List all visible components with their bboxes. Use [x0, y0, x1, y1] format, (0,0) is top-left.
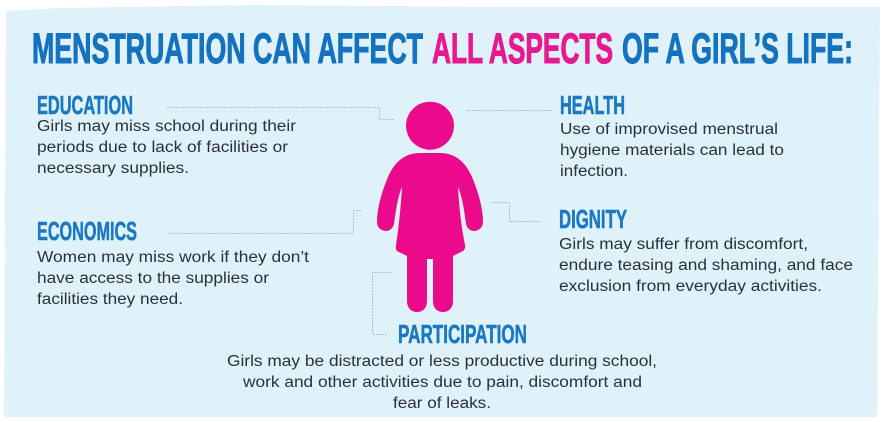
panel: health: Use of improvised menstrual [560, 121, 778, 138]
panel: participation: Girls may be distracted or less productive during school, [227, 353, 657, 370]
panel: health: hygiene materials can lead to [560, 142, 784, 159]
connector: education [167, 108, 394, 120]
panel: participation: work and other activities due to pain, discomfort and [242, 374, 642, 391]
panel: education: Girls may miss school during their [37, 118, 296, 135]
panel: education: EDUCATION [37, 90, 133, 120]
panel: economics [37, 216, 310, 308]
connector: participation [372, 272, 391, 334]
connector: health [466, 110, 552, 112]
panel: economics: facilities they need. [37, 291, 183, 308]
title: ALL ASPECTS [432, 26, 613, 73]
connector: dignity [491, 202, 540, 222]
panel: dignity [559, 204, 853, 295]
title: MENSTRUATION CAN AFFECT [32, 26, 423, 73]
panel: economics: Women may miss work if they don’t [37, 249, 310, 266]
panel: health: HEALTH [560, 90, 625, 120]
figure head [406, 102, 454, 150]
panel: education: periods due to lack of facilities or [37, 139, 288, 156]
figure body [377, 153, 483, 312]
panel: participation: fear of leaks. [393, 395, 491, 412]
panel: economics: have access to the supplies or [37, 270, 269, 287]
panel: education: necessary supplies. [37, 160, 189, 177]
panel: participation [227, 319, 657, 412]
panel: dignity: endure teasing and shaming, and face [559, 257, 853, 274]
icon: girl figure [377, 102, 483, 312]
panel: education [37, 90, 296, 177]
panel: health [560, 90, 784, 180]
panel: dignity: Girls may suffer from discomfort, [559, 236, 808, 253]
panel: health: infection. [560, 163, 628, 180]
panel: participation: PARTICIPATION [398, 319, 527, 349]
panel: dignity: exclusion from everyday activities. [559, 278, 822, 295]
panel: economics: ECONOMICS [37, 216, 137, 246]
connector: economics [169, 210, 362, 234]
panel: dignity: DIGNITY [559, 204, 627, 234]
